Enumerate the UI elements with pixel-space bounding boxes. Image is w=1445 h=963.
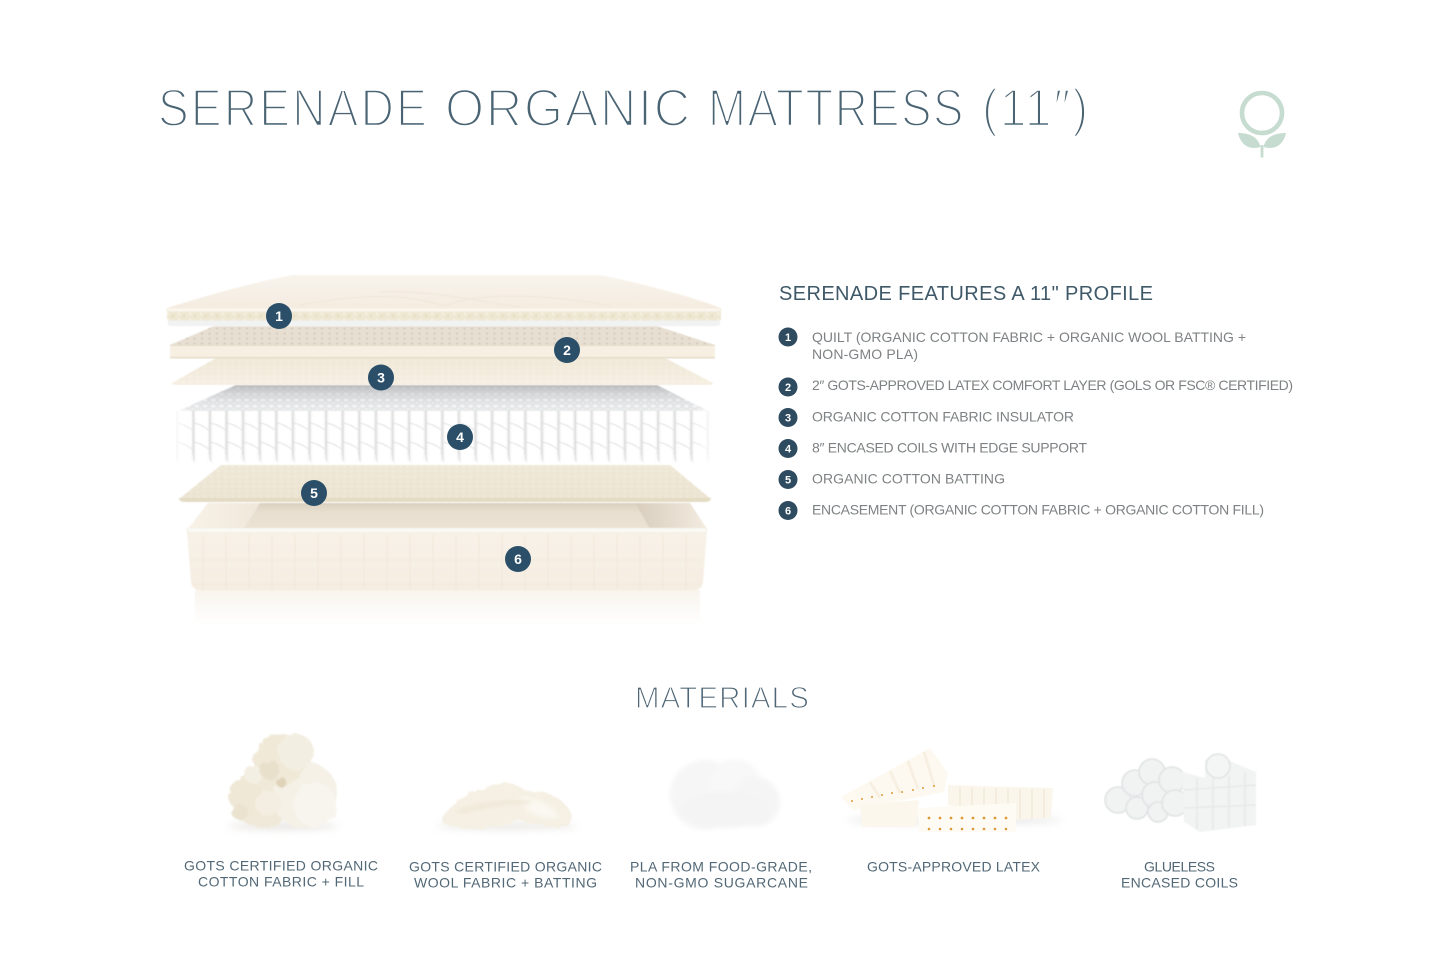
- layer 2: latex comfort layer: [170, 326, 715, 358]
- icon: wool batting: [437, 782, 577, 828]
- label: encased coils: ENCASED COILS: [1121, 874, 1238, 890]
- layer 3: organic cotton insulator: [172, 358, 713, 385]
- marker 3: 3: [377, 370, 385, 386]
- feature 2: 2″ GOTS-APPROVED LATEX COMFORT LAYER (GOLS OR FSC® CERTIFIED): [812, 377, 1293, 393]
- label: organic wool: WOOL FABRIC + BATTING: [414, 874, 597, 890]
- marker 4: [447, 424, 473, 450]
- label: organic wool: [409, 858, 602, 890]
- feature 4: 8″ ENCASED COILS WITH EDGE SUPPORT: [812, 440, 1087, 456]
- feature 4: 4: [785, 444, 792, 456]
- label: encased coils: [1121, 858, 1238, 890]
- label: organic cotton: GOTS CERTIFIED ORGANIC: [184, 858, 378, 874]
- feature 5: ORGANIC COTTON BATTING: [812, 470, 1005, 486]
- feature 1: [778, 328, 1246, 362]
- label: organic cotton: [184, 858, 378, 890]
- marker 4: 4: [456, 429, 464, 445]
- feature 3: ORGANIC COTTON FABRIC INSULATOR: [812, 408, 1074, 424]
- marker 5: [301, 480, 327, 506]
- feature 1: 1: [785, 332, 791, 344]
- label: PLA: PLA FROM FOOD-GRADE,: [630, 858, 812, 874]
- marker 2: 2: [563, 342, 571, 358]
- feature 5: 5: [785, 474, 791, 486]
- label: encased coils: GLUELESS: [1144, 858, 1215, 874]
- material: encased coils: [1105, 754, 1256, 890]
- icon: logo flower: [1238, 93, 1286, 158]
- icon: cotton tuft: [228, 734, 338, 829]
- marker 1: [266, 303, 292, 329]
- encasement reflection: [195, 590, 700, 627]
- material: organic cotton: [184, 734, 378, 890]
- icon: coil cluster: [1105, 754, 1256, 832]
- marker 3: [368, 364, 394, 390]
- material: latex: [841, 748, 1063, 874]
- feature 1: QUILT (ORGANIC COTTON FABRIC + ORGANIC WOOL BATTING +: [812, 329, 1246, 345]
- feature 6: ENCASEMENT (ORGANIC COTTON FABRIC + ORGANIC COTTON FILL): [812, 502, 1264, 518]
- label: PLA: NON-GMO SUGARCANE: [635, 874, 808, 890]
- feature 1: NON-GMO PLA): [812, 346, 918, 362]
- title: (11″): [982, 78, 1088, 138]
- label: latex: GOTS-APPROVED LATEX: [867, 858, 1041, 874]
- layer 1: quilt: [167, 275, 721, 326]
- icon: latex pieces: [841, 748, 1063, 832]
- marker 5: 5: [310, 485, 318, 501]
- label: PLA: [630, 858, 812, 890]
- layer 4: encased coils: [174, 385, 712, 466]
- title: ORGANIC: [445, 78, 690, 137]
- material: PLA: [630, 759, 812, 890]
- layer 5: organic cotton batting: [179, 465, 711, 502]
- icon: PLA fibre puff: [670, 759, 780, 830]
- title: [158, 78, 1088, 138]
- marker 6: [505, 546, 531, 572]
- features panel: [778, 283, 1293, 520]
- features heading: SERENADE FEATURES A 11" PROFILE: [779, 283, 1153, 305]
- title: MATTRESS: [708, 79, 963, 138]
- marker 6: 6: [514, 551, 522, 567]
- materials heading: MATERIALS: [635, 681, 809, 715]
- feature 6: 6: [785, 506, 791, 518]
- marker 1: 1: [275, 308, 283, 324]
- material: organic wool: [409, 782, 602, 890]
- label: organic cotton: COTTON FABRIC + FILL: [198, 874, 364, 890]
- latex holes: [851, 785, 1007, 830]
- marker 2: [554, 337, 580, 363]
- layer 6: encasement: [187, 503, 707, 627]
- title: SERENADE: [158, 78, 427, 138]
- feature 3: 3: [785, 412, 791, 424]
- feature 2: 2: [785, 382, 791, 394]
- label: organic wool: GOTS CERTIFIED ORGANIC: [409, 858, 602, 874]
- mattress layer diagram: [167, 275, 721, 627]
